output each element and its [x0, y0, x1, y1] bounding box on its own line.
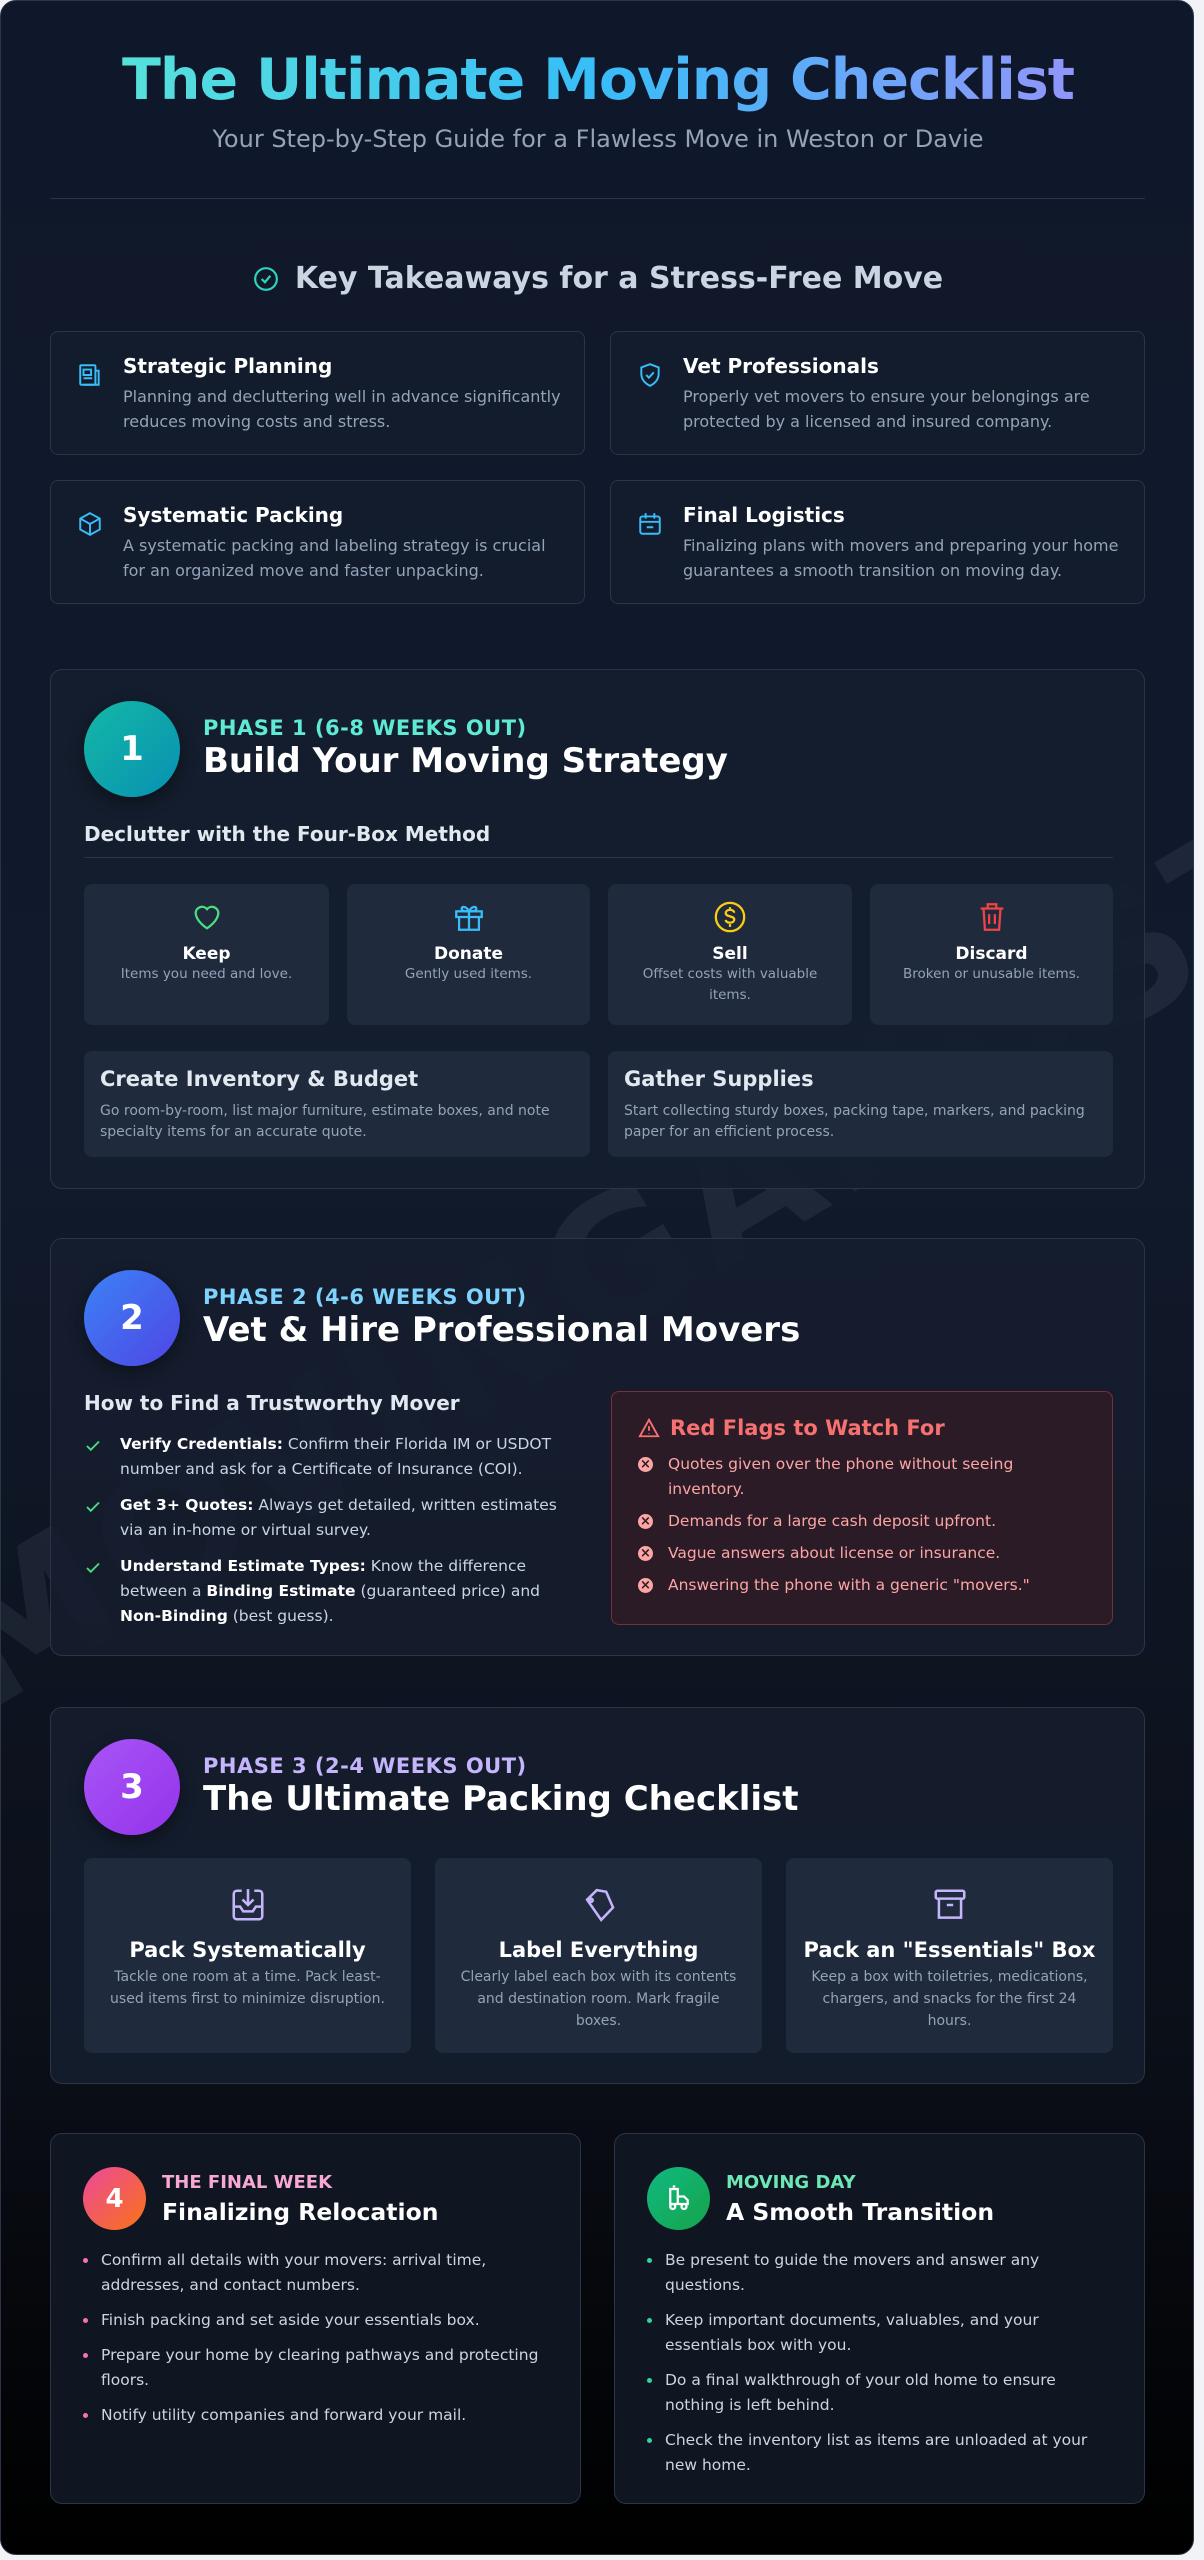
declutter heading: Declutter with the Four-Box Method: [84, 822, 490, 846]
icon: dolly: [647, 2167, 710, 2230]
checklist: [86, 1435, 557, 1625]
final week title: Finalizing Relocation: [162, 2198, 438, 2226]
title: The Ultimate Moving Checklist: [122, 47, 1074, 113]
badge 2: 2: [120, 1298, 144, 1338]
final week list: Finish packing and set aside your essentials box.: [101, 2311, 480, 2329]
heading: key takeaways: Key Takeaways for a Stress-Free Move: [295, 261, 943, 296]
final week list: Notify utility companies and forward your mail.: [101, 2406, 466, 2424]
red flags list: Answering the phone with a generic "movers.": [668, 1576, 1030, 1594]
takeaway: vet professionals: [610, 331, 1145, 455]
box: donate: Gently used items.: [405, 966, 532, 982]
card: label everything: Clearly label each box with its contents and destination room. Mark fragile boxes.: [461, 1969, 736, 2029]
panel: final week: [50, 2133, 581, 2504]
moving day list: Be present to guide the movers and answer any questions.: [665, 2251, 1039, 2294]
takeaway: final logistics: Final Logistics: [683, 503, 845, 527]
card: pack systematically: Tackle one room at a time. Pack least-used items first to minimize disruption.: [110, 1969, 385, 2007]
moving day title: A Smooth Transition: [726, 2198, 994, 2226]
badge 4: 4: [105, 2184, 124, 2214]
phase 1 title: Build Your Moving Strategy: [203, 741, 728, 781]
gather supplies: Start collecting sturdy boxes, packing tape, markers, and packing paper for an efficient process.: [624, 1103, 1085, 1140]
red flags box: [611, 1391, 1113, 1625]
title: [1, 41, 1195, 119]
final week list: [83, 2251, 538, 2424]
phase 2 label: PHASE 2 (4-6 WEEKS OUT): [203, 1285, 527, 1309]
box: discard: Discard: [955, 944, 1028, 964]
final week list: Prepare your home by clearing pathways and protecting floors.: [101, 2346, 538, 2389]
red flags list: Quotes given over the phone without seeing inventory.: [668, 1455, 1013, 1498]
moving day list: Do a final walkthrough of your old home to ensure nothing is left behind.: [665, 2371, 1056, 2414]
takeaway: vet professionals: Properly vet movers to ensure your belongings are protected by a licensed and insured company.: [683, 387, 1090, 431]
final week label: THE FINAL WEEK: [162, 2172, 332, 2193]
card: essentials box: Keep a box with toiletries, medications, chargers, and snacks for the first 24 hours.: [811, 1969, 1088, 2029]
inventory & budget: Create Inventory & Budget: [100, 1067, 418, 1091]
phase 3 label: PHASE 3 (2-4 WEEKS OUT): [203, 1754, 527, 1778]
badge 1: [84, 701, 180, 797]
red flags list: Vague answers about license or insurance.: [668, 1544, 1000, 1562]
takeaway: final logistics: [610, 480, 1145, 604]
card: label everything: Label Everything: [499, 1938, 698, 1962]
takeaway: strategic planning: Strategic Planning: [123, 354, 332, 378]
checklist: Understand Estimate Types: Know the difference between a Binding Estimate (guaranteed price) and Non-Binding (best guess).: [120, 1557, 540, 1625]
checklist: Get 3+ Quotes: Always get detailed, written estimates via an in-home or virtual survey.: [120, 1496, 557, 1539]
panel: phase 3: [50, 1707, 1145, 2084]
red flags list: Demands for a large cash deposit upfront.: [668, 1512, 996, 1530]
takeaway: final logistics: Finalizing plans with movers and preparing your home guarantees a smooth transition on moving day.: [683, 536, 1118, 580]
card: essentials box: Pack an "Essentials" Box: [804, 1938, 1095, 1962]
badge 3: [84, 1739, 180, 1835]
box: keep: Items you need and love.: [121, 966, 292, 982]
badge 3: 3: [120, 1767, 144, 1807]
takeaway: strategic planning: [50, 331, 585, 455]
panel: phase 1: [50, 669, 1145, 1189]
inventory & budget: [84, 1051, 590, 1157]
final week list: Confirm all details with your movers: arrival time, addresses, and contact numbers.: [101, 2251, 486, 2294]
phase 2 title: Vet & Hire Professional Movers: [203, 1310, 800, 1350]
takeaway: vet professionals: Vet Professionals: [683, 354, 879, 378]
moving day label: MOVING DAY: [726, 2172, 856, 2193]
box: discard: [870, 884, 1113, 1025]
gather supplies: [608, 1051, 1113, 1157]
takeaway: strategic planning: Planning and decluttering well in advance significantly reduces moving costs and stress.: [123, 387, 561, 431]
takeaway: systematic packing: [50, 480, 585, 604]
trustworthy mover heading: How to Find a Trustworthy Mover: [84, 1391, 460, 1415]
phase 1 label: PHASE 1 (6-8 WEEKS OUT): [203, 716, 527, 740]
takeaway: systematic packing: A systematic packing and labeling strategy is crucial for an organized move and faster unpacking.: [123, 536, 546, 580]
takeaway: systematic packing: Systematic Packing: [123, 503, 343, 527]
panel: moving day: [614, 2133, 1145, 2504]
box: sell: Sell: [712, 944, 748, 964]
box: donate: Donate: [434, 944, 503, 964]
red flags list: [638, 1455, 1030, 1594]
badge 2: [84, 1270, 180, 1366]
card: pack systematically: Pack Systematically: [129, 1938, 366, 1962]
card: label everything: [435, 1858, 762, 2053]
badge 1: 1: [120, 729, 144, 769]
box: keep: Keep: [182, 944, 231, 964]
red flags heading: Red Flags to Watch For: [670, 1416, 945, 1440]
moving day list: Keep important documents, valuables, and your essentials box with you.: [665, 2311, 1039, 2354]
moving day list: [647, 2251, 1088, 2474]
moving day list: Check the inventory list as items are unloaded at your new home.: [665, 2431, 1087, 2474]
badge 4: [83, 2167, 146, 2230]
phase 3 title: The Ultimate Packing Checklist: [203, 1779, 799, 1819]
box: discard: Broken or unusable items.: [903, 966, 1080, 982]
box: sell: [608, 884, 852, 1025]
card: pack systematically: [84, 1858, 411, 2053]
box: sell: Offset costs with valuable items.: [643, 966, 817, 1003]
card: essentials box: [786, 1858, 1113, 2053]
panel: phase 2: [50, 1238, 1145, 1656]
gather supplies: Gather Supplies: [624, 1067, 814, 1091]
inventory & budget: Go room-by-room, list major furniture, estimate boxes, and note specialty items for an accurate quote.: [100, 1103, 550, 1140]
box: donate: [347, 884, 590, 1025]
checklist: Verify Credentials: Confirm their Florida IM or USDOT number and ask for a Certificate of Insurance (COI).: [120, 1435, 551, 1478]
subtitle: Your Step-by-Step Guide for a Flawless Move in Weston or Davie: [212, 125, 984, 153]
box: keep: [84, 884, 329, 1025]
